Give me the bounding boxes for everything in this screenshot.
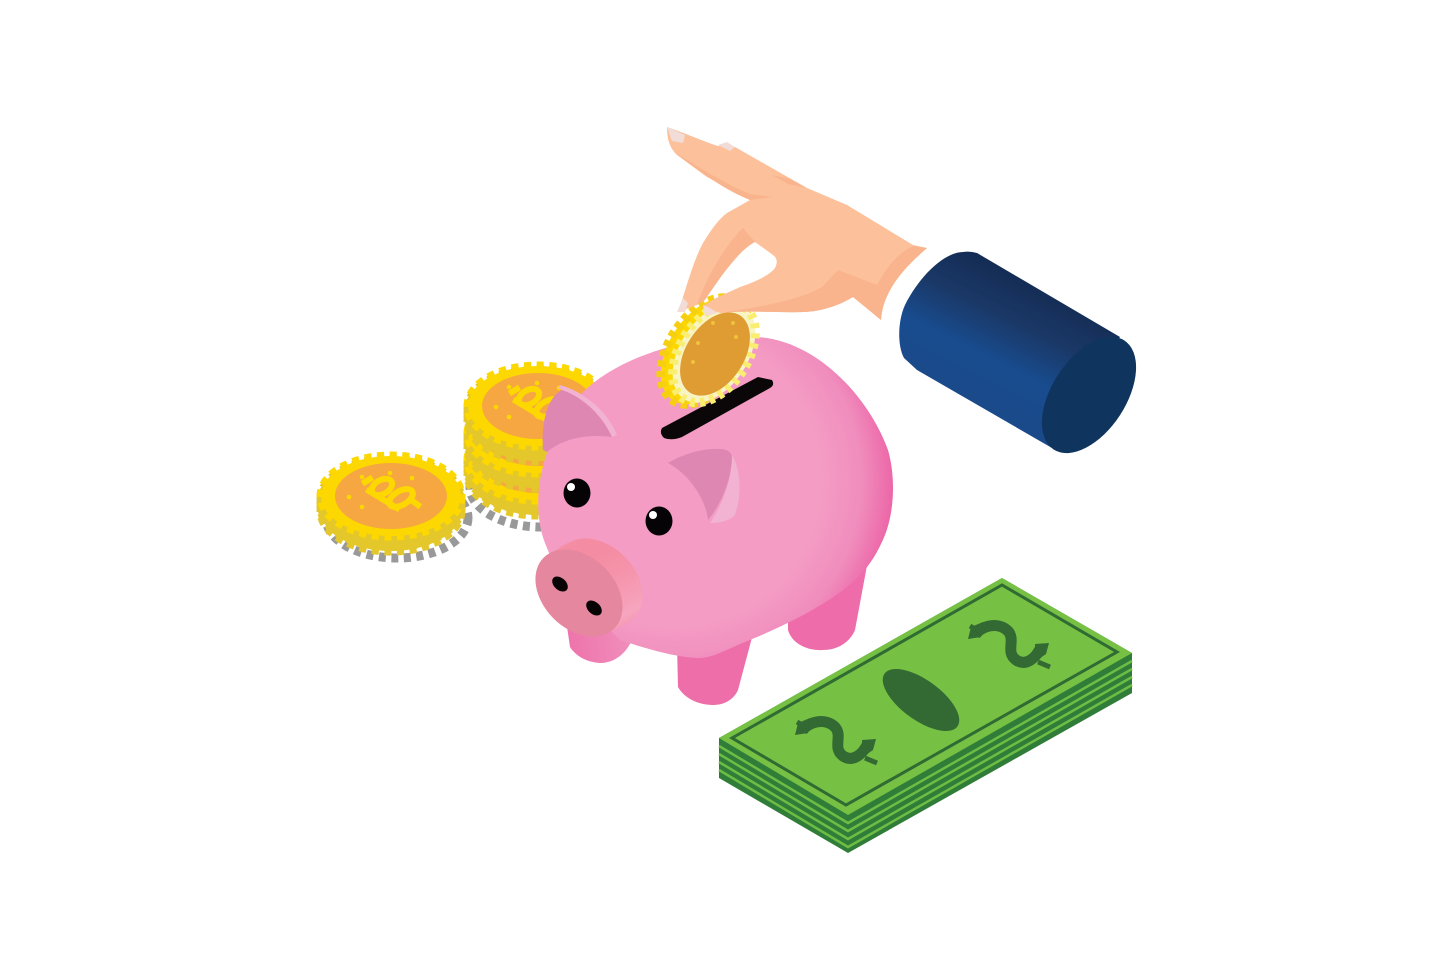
pig body: [538, 337, 893, 658]
suit sleeve: [899, 252, 1155, 470]
left ear: [543, 385, 617, 452]
snout: [518, 521, 660, 654]
fingernails: [667, 127, 735, 316]
coin slot: [661, 377, 773, 439]
right ear: [668, 449, 740, 523]
left eye: [564, 478, 590, 508]
pig legs: [566, 560, 868, 705]
back coin stack: [468, 366, 612, 527]
hand shading: [674, 152, 927, 320]
dollar sign right: [968, 622, 1050, 667]
stack of dollar bills: [719, 578, 1132, 853]
front bitcoin coin: [321, 456, 468, 558]
dollar sign left: [795, 718, 877, 763]
bill oval: [873, 657, 969, 743]
falling gold coin: [643, 282, 772, 420]
right eye: [646, 506, 672, 536]
hand: [667, 127, 927, 320]
